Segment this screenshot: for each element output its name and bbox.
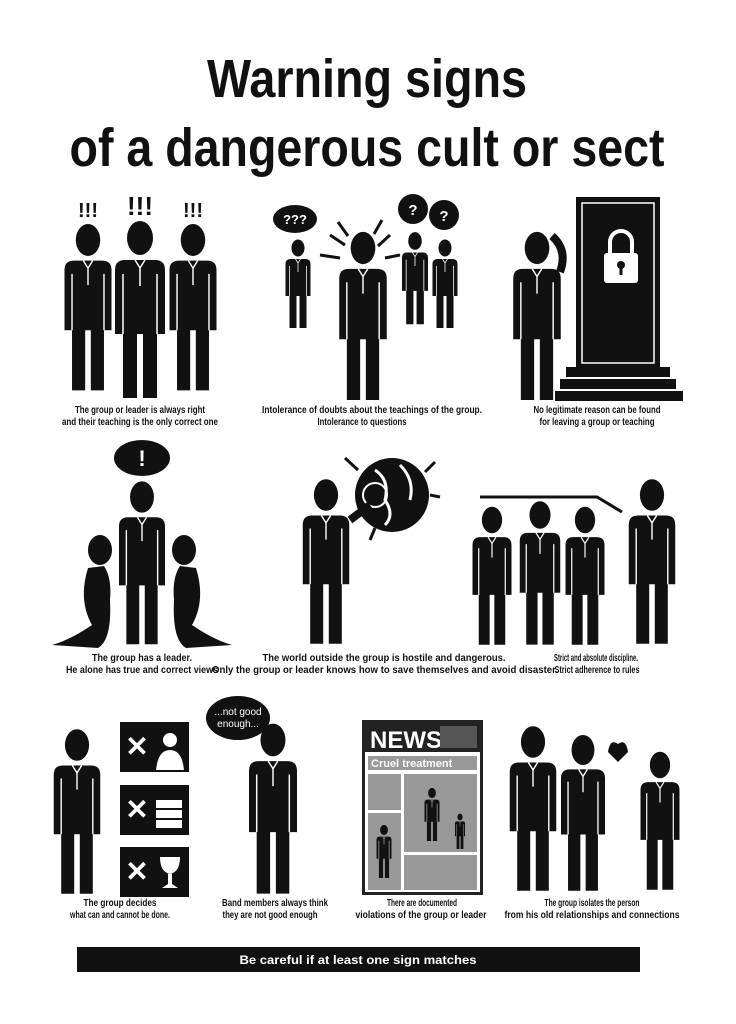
panel: leader always right: [62, 191, 218, 428]
panel: not good enough: Band members always think: [222, 898, 328, 909]
panel: news: NEWS: [370, 727, 442, 754]
panel: leader with true views: !: [138, 446, 146, 471]
panel: no reason to leave: No legitimate reason can be found: [534, 405, 660, 416]
panel: strict discipline: [472, 479, 675, 676]
panel: intolerance of doubts: Intolerance of doubts about the teachings of the group.: [262, 405, 482, 416]
panel: leader with true views: The group has a leader.: [92, 653, 192, 664]
panel: group decides: ✕: [125, 794, 149, 825]
panel: group decides: ✕: [125, 856, 149, 887]
panel: hostile world: [212, 458, 558, 676]
panel: intolerance of doubts: ???: [283, 212, 307, 227]
panel: news: There are documented: [387, 898, 457, 909]
panel: strict discipline: Strict and absolute discipline.: [554, 653, 638, 664]
panel: not good enough: enough...: [217, 719, 259, 730]
panel: leader always right: !!!: [78, 200, 98, 222]
panel: leader always right: !!!: [183, 200, 203, 222]
panel: no reason to leave: [513, 197, 683, 428]
footer banner: [77, 947, 640, 972]
panel: isolation: from his old relationships and connections: [504, 910, 680, 921]
panel: leader always right: and their teaching is the only correct one: [62, 417, 218, 428]
panel: intolerance of doubts: [262, 194, 482, 428]
panel: no reason to leave: for leaving a group or teaching: [540, 417, 654, 428]
panel: not good enough: [206, 696, 328, 921]
panel: intolerance of doubts: Intolerance to questions: [318, 417, 407, 428]
panel: not good enough: ...not good: [214, 707, 262, 718]
footer banner: Be careful if at least one sign matches: [240, 953, 477, 967]
panel: news: Cruel treatment: [371, 758, 453, 770]
panel: news: [356, 720, 487, 921]
title: Warning signs: [207, 49, 527, 109]
panel: hostile world: Only the group or leader knows how to save themselves and avoid disaster.: [212, 665, 558, 676]
panel: leader always right: The group or leader is always right: [75, 405, 206, 416]
panel: leader with true views: [52, 440, 232, 676]
panel: hostile world: The world outside the group is hostile and dangerous.: [262, 653, 506, 664]
panel: intolerance of doubts: ?: [439, 208, 449, 225]
panel: leader with true views: He alone has true and correct views: [66, 665, 218, 676]
panel: strict discipline: Strict adherence to rules: [554, 665, 640, 676]
panel: leader always right: !!!: [127, 191, 153, 221]
panel: isolation: The group isolates the person: [544, 898, 640, 909]
panel: not good enough: they are not good enough: [222, 910, 318, 921]
panel: news: violations of the group or leader: [356, 910, 487, 921]
panel: intolerance of doubts: ?: [408, 202, 418, 219]
panel: group decides: [54, 722, 189, 921]
title: [70, 49, 665, 178]
panel: group decides: what can and cannot be done.: [69, 910, 170, 921]
panel: group decides: The group decides: [84, 898, 157, 909]
panel: isolation: [504, 726, 680, 921]
panel: group decides: ✕: [125, 731, 149, 762]
